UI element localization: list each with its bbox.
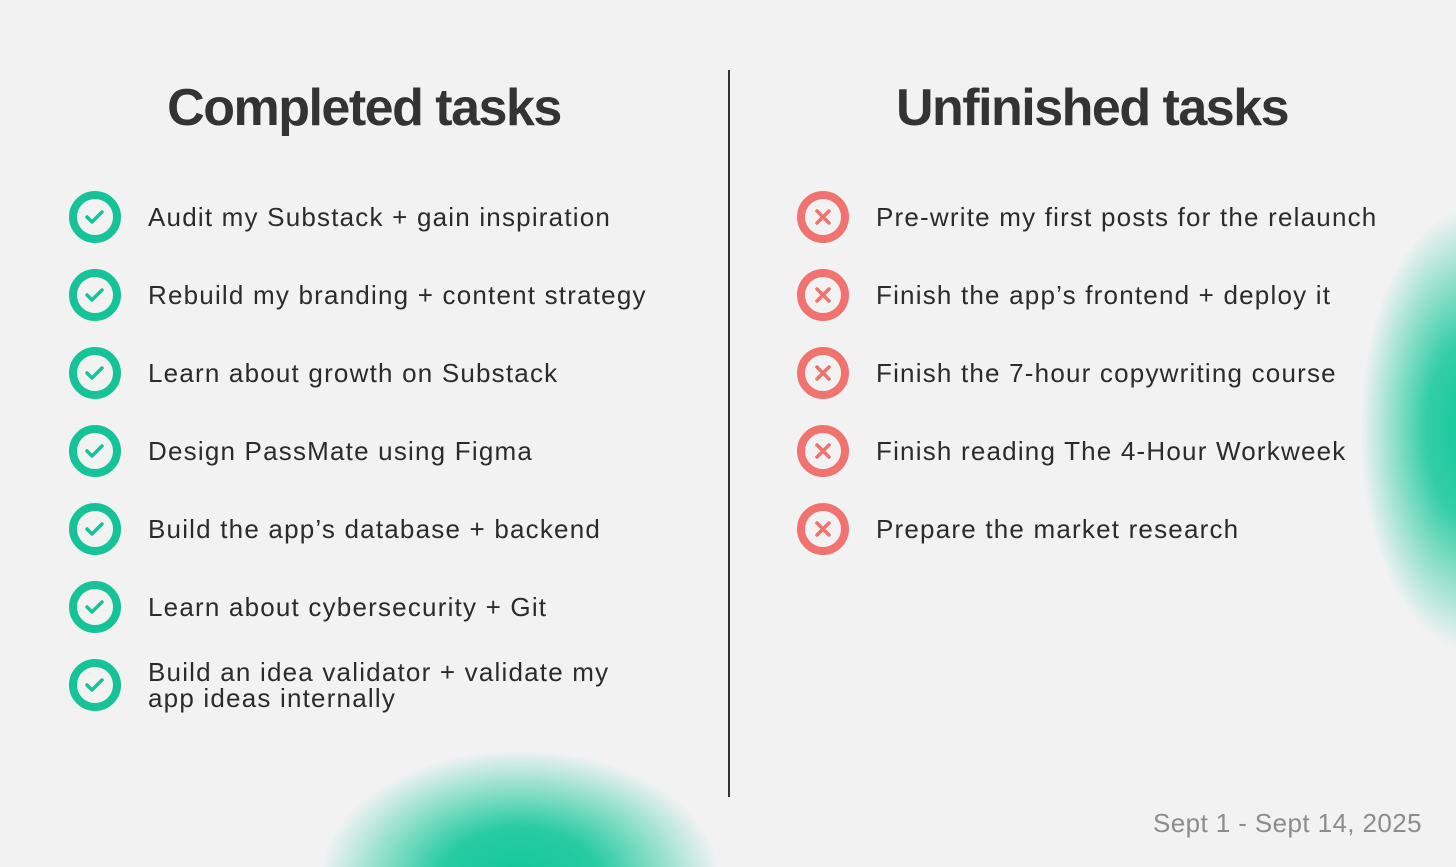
item: frontend <box>797 269 1331 321</box>
item: validator <box>69 657 609 713</box>
item: prewrite <box>797 191 1377 243</box>
item: reading: Finish reading The 4-Hour Workweek <box>876 436 1346 466</box>
item: cybersecurity: Learn about cybersecurity + Git <box>148 592 547 622</box>
item: course: Finish the 7-hour copywriting course <box>876 358 1337 388</box>
item: rebuild: Rebuild my branding + content strategy <box>148 280 647 310</box>
item: audit: Audit my Substack + gain inspiration <box>148 202 611 232</box>
item: research <box>797 503 1239 555</box>
item: design: Design PassMate using Figma <box>148 436 533 466</box>
date label: Sept 1 - Sept 14, 2025 <box>1153 808 1422 838</box>
item: research: Prepare the market research <box>876 514 1239 544</box>
item: design <box>69 425 533 477</box>
item: rebuild <box>69 269 647 321</box>
item: validator: app ideas internally <box>148 683 396 713</box>
item: growth <box>69 347 558 399</box>
item: reading <box>797 425 1346 477</box>
item: audit <box>69 191 611 243</box>
item: database <box>69 503 601 555</box>
item: course <box>797 347 1337 399</box>
item: cybersecurity <box>69 581 547 633</box>
item: growth: Learn about growth on Substack <box>148 358 558 388</box>
item: database: Build the app’s database + backend <box>148 514 601 544</box>
title: unfinished: Unfinished tasks <box>896 79 1288 137</box>
panel: completed list <box>69 191 647 713</box>
divider <box>728 70 730 797</box>
panel: unfinished list <box>797 191 1377 555</box>
item: frontend: Finish the app’s frontend + deploy it <box>876 280 1331 310</box>
item: prewrite: Pre-write my first posts for the relaunch <box>876 202 1377 232</box>
item: validator: Build an idea validator + validate my <box>148 657 609 687</box>
title: completed: Completed tasks <box>167 79 561 137</box>
